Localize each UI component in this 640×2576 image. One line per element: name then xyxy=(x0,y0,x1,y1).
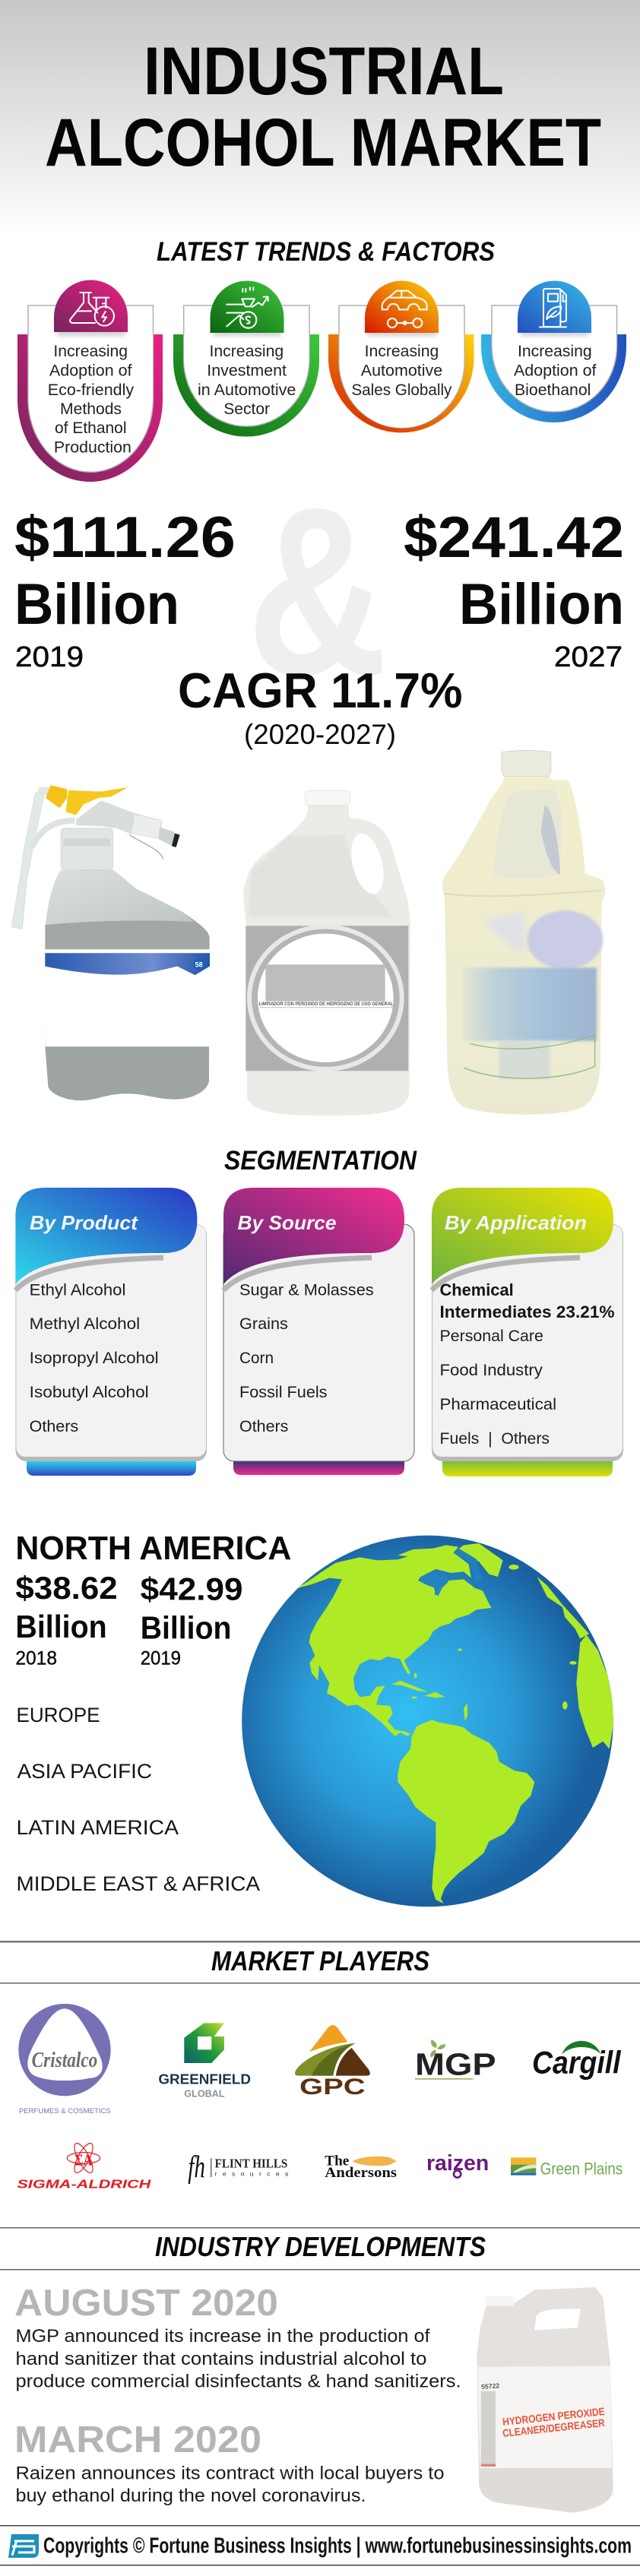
rule above industry developments xyxy=(0,2227,640,2228)
panel: trend 1 eco-friendly ethanol: Methods xyxy=(60,400,122,418)
stat: 2027 market value: $241.42 xyxy=(404,505,624,570)
stat: CAGR xyxy=(178,663,462,750)
panel: trend 4 bioethanol xyxy=(481,280,626,422)
logo: Cristalco: Cristalco xyxy=(32,2048,97,2072)
logo: Sigma-Aldrich: ΣA xyxy=(74,2152,93,2169)
panel: trend 1 eco-friendly ethanol xyxy=(17,280,163,482)
stat: 2027 market value: Billion xyxy=(459,572,624,637)
panel: by product: Methyl Alcohol xyxy=(30,1315,140,1333)
panel: by application: By Application xyxy=(445,1211,587,1234)
region list: MIDDLE EAST & AFRICA xyxy=(17,1872,260,1895)
panel: trend 1 eco-friendly ethanol: of Ethanol xyxy=(55,419,126,437)
regional stats: north america xyxy=(15,1530,291,1669)
panel: by source: Fossil Fuels xyxy=(239,1384,327,1401)
heading: industry developments: INDUSTRY DEVELOPMENTS xyxy=(155,2231,486,2262)
logo: The Andersons xyxy=(325,2153,397,2181)
regional stats: north america: $42.99 xyxy=(141,1571,243,1607)
stat: 2019 market value: Billion xyxy=(14,572,179,637)
panel: by application: Fuels | Others xyxy=(439,1430,550,1448)
regional stats: north america: Billion xyxy=(141,1610,231,1646)
logo: The Andersons: Andersons xyxy=(325,2165,397,2181)
panel: by source: Others xyxy=(239,1418,288,1435)
logo: Greenfield Global xyxy=(158,2023,251,2100)
development: March 2020: buy ethanol during the novel coronavirus. xyxy=(15,2486,366,2506)
icon: fuel pump with leaf xyxy=(540,289,566,327)
regional stats: north america: 2019 xyxy=(141,1647,181,1669)
header background xyxy=(0,0,640,239)
illustration: hydrogen peroxide jug: HYDROGEN PEROXIDE xyxy=(502,2405,605,2428)
globe xyxy=(242,1536,614,1907)
stat: 2027 market value xyxy=(404,505,624,673)
panel: by source: By Source xyxy=(237,1211,336,1234)
market players section rule top xyxy=(0,1941,640,1942)
panel: trend 2 automotive investment: Investment xyxy=(207,362,287,380)
logo: Green Plains xyxy=(511,2157,623,2179)
logo: Greenfield Global: GLOBAL xyxy=(184,2089,225,2100)
illustration: spray dispenser bottle: 58 xyxy=(195,961,203,969)
logo: Flint Hills Resources: fh xyxy=(188,2150,205,2185)
illustration: hydrogen peroxide jug: CLEANER/DEGREASER xyxy=(502,2416,605,2439)
icon: Fortune Business Insights logo xyxy=(8,2534,39,2558)
development: March 2020 xyxy=(14,2419,444,2506)
icon: money bag with trend arrow xyxy=(227,287,268,328)
illustration: spray dispenser bottle xyxy=(11,785,210,1100)
region list: EUROPE xyxy=(17,1704,100,1726)
development: August 2020 xyxy=(14,2283,461,2392)
logo: Flint Hills Resources xyxy=(188,2150,289,2185)
panel: trend 4 bioethanol: Adoption of xyxy=(514,362,597,380)
panel: by product: By Product xyxy=(30,1211,138,1234)
logo: GPC xyxy=(295,2025,370,2100)
icon: car and chassis xyxy=(382,291,427,328)
logo: Greenfield Global: GREENFIELD xyxy=(158,2071,251,2087)
panel: by application xyxy=(432,1188,623,1476)
logo: Green Plains: Green Plains xyxy=(540,2160,623,2179)
panel: by application: Chemical xyxy=(439,1280,514,1299)
panel: trend 2 automotive investment: in Automotive xyxy=(198,381,296,399)
panel: by product: Isobutyl Alcohol xyxy=(30,1384,149,1401)
panel: trend 3 automotive sales xyxy=(328,280,474,432)
panel: by source: Sugar & Molasses xyxy=(239,1281,374,1299)
regional stats: north america: NORTH AMERICA xyxy=(15,1530,291,1567)
panel: trend 2 automotive investment xyxy=(173,280,319,436)
logo: Flint Hills Resources: resources xyxy=(215,2169,289,2177)
logo: Sigma-Aldrich xyxy=(17,2141,151,2191)
panel: by product: Isopropyl Alcohol xyxy=(30,1350,159,1367)
heading: segmentation: SEGMENTATION xyxy=(224,1146,417,1176)
illustration: hydrogen peroxide jug xyxy=(477,2287,613,2513)
stat: 2019 market value xyxy=(14,505,236,673)
panel: trend 3 automotive sales: Automotive xyxy=(361,362,442,380)
development: August 2020: hand sanitizer that contains industrial alcohol to xyxy=(15,2349,427,2369)
panel: trend 4 bioethanol: Increasing xyxy=(518,342,592,360)
heading: market players: MARKET PLAYERS xyxy=(211,1945,429,1976)
logo: The Andersons: The xyxy=(325,2153,349,2169)
panel: by product: Ethyl Alcohol xyxy=(30,1281,125,1299)
development: March 2020: MARCH 2020 xyxy=(14,2419,261,2460)
heading: latest trends and factors: LATEST TRENDS & FACTORS xyxy=(157,237,495,267)
panel: trend 2 automotive investment: Increasing xyxy=(210,342,284,360)
regional stats: north america: $38.62 xyxy=(15,1570,118,1606)
logo: Flint Hills Resources: FLINT HILLS xyxy=(215,2157,287,2171)
stat: CAGR: (2020-2027) xyxy=(244,719,396,750)
panel: by source: Grains xyxy=(239,1315,288,1333)
illustration: cream gallon jug xyxy=(442,750,605,1115)
title xyxy=(45,33,601,180)
development: March 2020: Raizen announces its contract with local buyers to xyxy=(15,2464,444,2483)
panel: by application: Food Industry xyxy=(439,1362,543,1379)
logo: GPC: GPC xyxy=(299,2074,366,2100)
decorative ampersand: & xyxy=(247,457,388,725)
panel: trend 4 bioethanol: Bioethanol xyxy=(515,381,591,399)
stat: CAGR: CAGR 11.7% xyxy=(178,663,462,718)
panel: trend 3 automotive sales: Sales Globally xyxy=(351,381,452,399)
logo: Sigma-Aldrich: SIGMA-ALDRICH xyxy=(17,2178,151,2191)
panel: by product: Others xyxy=(30,1418,78,1435)
icon: flask and beaker xyxy=(70,293,114,326)
development: August 2020: AUGUST 2020 xyxy=(14,2283,278,2324)
footer top rule xyxy=(0,2525,640,2526)
stat: 2019 market value: 2019 xyxy=(15,641,84,673)
panel: trend 1 eco-friendly ethanol: Adoption of xyxy=(49,362,132,380)
region list xyxy=(17,1704,260,1895)
illustration: white gallon jug with grey label xyxy=(243,791,410,1116)
title: INDUSTRIAL xyxy=(144,33,504,109)
region list: ASIA PACIFIC xyxy=(17,1760,152,1783)
logo: Cristalco xyxy=(18,2004,111,2115)
panel: trend 1 eco-friendly ethanol: Production xyxy=(54,438,131,456)
logo: MGP: MGP xyxy=(415,2047,496,2082)
panel: by application: Pharmaceutical xyxy=(439,1396,556,1413)
panel: trend 3 automotive sales: Increasing xyxy=(365,342,439,360)
panel: trend 2 automotive investment: Sector xyxy=(223,400,270,418)
panel: by product xyxy=(15,1188,207,1476)
panel: by application: Intermediates 23.21% xyxy=(439,1302,614,1321)
regional stats: north america: Billion xyxy=(15,1609,107,1644)
illustration: white gallon jug with grey label: LIMPIADOR CON PERÓXIDO DE HIDRÓGENO DE USO GENERAL xyxy=(259,1001,394,1007)
development: August 2020: MGP announced its increase in the production of xyxy=(15,2326,430,2347)
panel: by source: Corn xyxy=(239,1350,274,1367)
panel: trend 1 eco-friendly ethanol: Increasing xyxy=(53,342,128,360)
development: August 2020: produce commercial disinfectants & hand sanitizers. xyxy=(15,2372,461,2392)
logo: Cristalco: PERFUMES & COSMETICS xyxy=(19,2107,111,2115)
illustration: hydrogen peroxide jug: 55722 xyxy=(481,2381,500,2391)
panel: by source xyxy=(223,1188,414,1475)
stat: 2027 market value: 2027 xyxy=(554,641,623,673)
panel: trend 1 eco-friendly ethanol: Eco-friendly xyxy=(48,381,134,399)
logo: Raizen: raizen xyxy=(426,2151,489,2176)
regional stats: north america: 2018 xyxy=(15,1647,57,1669)
panel: by application: Personal Care xyxy=(439,1328,543,1345)
logo: Cargill: Cargill xyxy=(532,2044,622,2080)
region list: LATIN AMERICA xyxy=(17,1816,179,1839)
stat: 2019 market value: $111.26 xyxy=(14,505,236,570)
